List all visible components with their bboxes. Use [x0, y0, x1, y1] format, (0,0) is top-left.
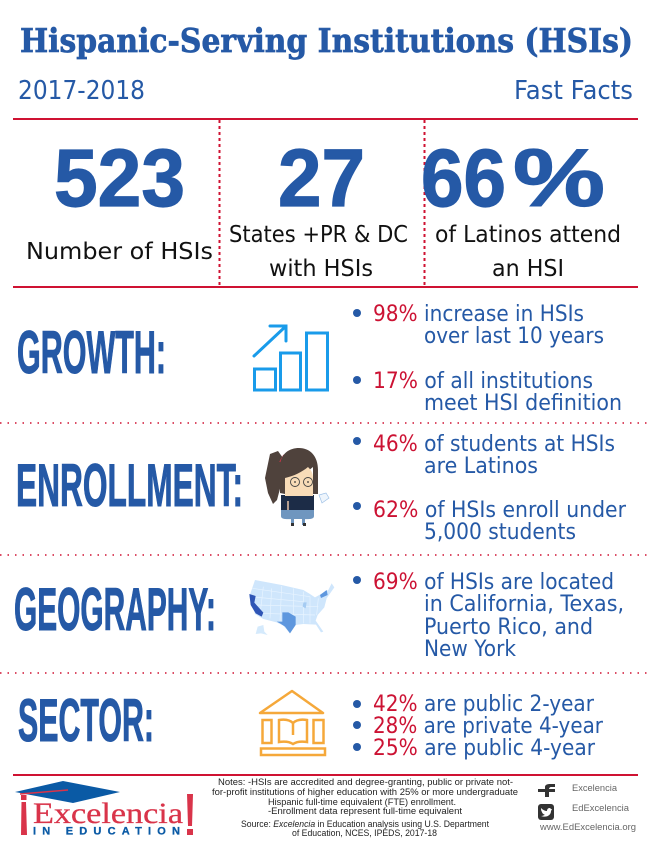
heading: enrollment: ENROLLMENT: — [16, 452, 243, 519]
growth facts: over last 10 years — [424, 324, 604, 349]
growth facts: 17% of all institutions — [373, 369, 593, 394]
icon: growth chart — [254, 326, 328, 390]
stat: Latinos: of Latinos attend — [435, 222, 621, 248]
enrollment facts: are Latinos — [424, 454, 538, 479]
icon: US map — [249, 580, 334, 635]
geography facts: New York — [424, 637, 516, 662]
notes and source: Notes: -HSIs are accredited and degree-granting, public or private not- — [218, 777, 513, 788]
sector facts: 28% are private 4-year — [373, 714, 604, 739]
stat: states — [229, 133, 408, 282]
stat: number of HSIs — [26, 133, 213, 265]
enrollment facts — [353, 432, 627, 545]
sector facts: 42% are public 2-year — [373, 692, 595, 717]
subtitle: year: 2017-2018 — [18, 76, 145, 106]
growth facts — [353, 302, 622, 416]
stat: states: States +PR & DC — [229, 222, 408, 248]
geography facts: 69% of HSIs are located — [373, 570, 614, 595]
icon: student character — [265, 448, 329, 526]
enrollment facts: 46% of students at HSIs — [373, 432, 615, 457]
logo: Excelencia in Education: IN EDUCATION — [33, 826, 180, 838]
stat: number of HSIs: 523 — [54, 133, 185, 224]
notes and source: of Education, NCES, IPEDS, 2017-18 — [292, 828, 437, 839]
icon: twitter — [538, 804, 554, 820]
enrollment facts: 62% of HSIs enroll under — [373, 498, 627, 523]
stat: Latinos: an HSI — [492, 256, 564, 282]
heading: growth: GROWTH: — [17, 319, 166, 386]
geography facts — [353, 570, 624, 662]
notes and source: Source: Excelencia in Education analysis using U.S. Department — [241, 819, 489, 830]
stat: Latinos: 66 — [421, 133, 506, 224]
geography facts: Puerto Rico, and — [424, 615, 593, 640]
website: www.EdExcelencia.org — [539, 822, 636, 833]
growth facts: meet HSI definition — [424, 391, 622, 416]
notes and source: -Enrollment data represent full-time equivalent — [268, 806, 462, 817]
logo: Excelencia in Education: Excelencia — [33, 797, 183, 830]
geography facts: in California, Texas, — [424, 592, 624, 617]
notes and source: for-profit institutions of higher education with 25% or more undergraduate — [212, 787, 518, 798]
notes and source — [212, 777, 518, 839]
stat: number of HSIs: Number of HSIs — [26, 239, 213, 265]
social handle: EdExcelencia: EdExcelencia — [572, 803, 630, 814]
stat: states: with HSIs — [269, 256, 373, 282]
icon: institution building — [260, 691, 325, 755]
logo: Excelencia in Education — [15, 781, 193, 838]
stat: states: 27 — [278, 133, 365, 224]
sector facts — [353, 692, 604, 761]
subtitle: fast facts: Fast Facts — [514, 76, 633, 106]
icon: facebook — [538, 784, 555, 797]
heading: sector: SECTOR: — [18, 687, 154, 754]
growth facts: 98% increase in HSIs — [373, 302, 584, 327]
stat: Latinos — [421, 133, 621, 282]
text: GEOGRAPHY: — [14, 576, 216, 643]
social handle: Excelencia: Excelencia — [572, 783, 618, 794]
sector facts: 25% are public 4-year — [373, 736, 596, 761]
enrollment facts: 5,000 students — [424, 520, 576, 545]
notes and source: Hispanic full-time equivalent (FTE) enrollment. — [268, 797, 456, 808]
stat: Latinos: % — [513, 133, 605, 224]
